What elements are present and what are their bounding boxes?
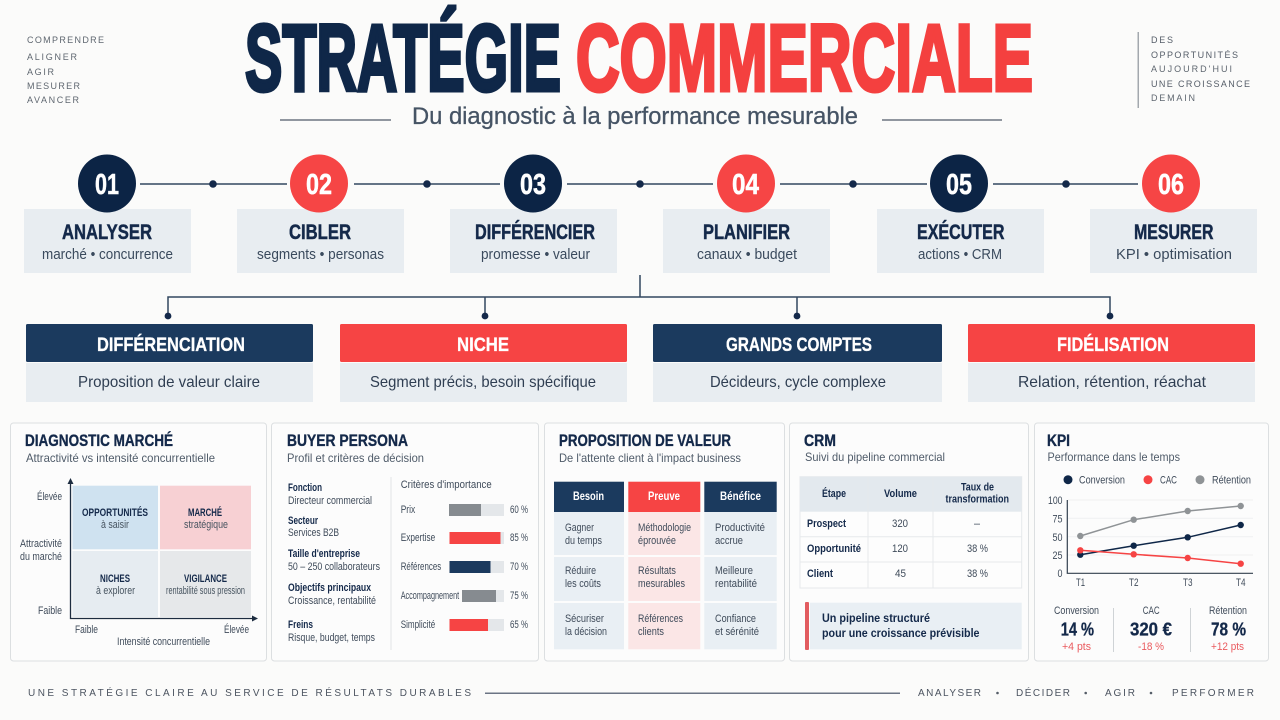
subheading: Profil et critères de décision	[287, 451, 424, 465]
stat: CAC: CAC	[1143, 605, 1160, 617]
column: besoin	[554, 482, 624, 649]
left keyword list: AVANCER	[27, 95, 80, 105]
matrix chart: stratégique	[184, 519, 228, 531]
legend: Conversion	[1079, 474, 1125, 486]
footer keywords	[918, 686, 1254, 699]
step 05: EXÉCUTER	[917, 221, 1004, 244]
pipeline table: –	[974, 518, 980, 530]
subheading: Attractivité vs intensité concurrentielle	[26, 451, 215, 465]
stat: conversion: Conversion	[1054, 605, 1099, 617]
pipeline table: Opportunité	[807, 543, 861, 555]
matrix chart: du marché	[20, 551, 62, 563]
line chart: T2	[1129, 577, 1138, 589]
pipeline table: 38 %	[967, 568, 988, 580]
step 06	[1090, 154, 1257, 273]
legend	[1064, 474, 1251, 486]
right tagline: OPPORTUNITÉS	[1151, 50, 1238, 60]
footer keywords: PERFORMER	[1172, 688, 1254, 699]
right tagline: AUJOURD'HUI	[1151, 64, 1232, 74]
matrix chart: rentabilité sous pression	[166, 585, 245, 597]
column: preuve: Méthodologie	[638, 522, 691, 534]
criteria bar chart: Simplicité	[401, 619, 435, 631]
step 05: actions • CRM	[918, 246, 1002, 263]
step 01: ANALYSER	[62, 221, 152, 244]
step 04	[663, 154, 830, 273]
pipeline table	[800, 477, 1022, 588]
stat: CAC	[1130, 605, 1172, 653]
persona profile: Objectifs principaux	[288, 582, 371, 594]
matrix chart: Attractivité	[20, 538, 62, 550]
step 01: 01	[95, 169, 119, 201]
step 05	[877, 154, 1044, 273]
step 06: 06	[1158, 169, 1184, 201]
panel: diagnostic marché	[10, 423, 266, 661]
left keyword list: COMPRENDRE	[27, 35, 104, 45]
step 01: marché • concurrence	[42, 246, 173, 263]
pipeline table: Volume	[884, 488, 917, 500]
column: bénéfice: Confiance	[715, 613, 756, 625]
stat: rétention: 78 %	[1211, 620, 1246, 640]
card: fidélisation: FIDÉLISATION	[1057, 334, 1169, 356]
criteria bar chart: 85 %	[510, 532, 528, 544]
footer keywords: ANALYSER	[918, 688, 981, 699]
pipeline table: 120	[892, 543, 908, 555]
card: niche	[340, 324, 627, 402]
card: fidélisation	[968, 324, 1255, 402]
card: grands comptes: GRANDS COMPTES	[726, 335, 872, 356]
column: bénéfice	[704, 482, 777, 649]
stat: conversion: 14 %	[1061, 620, 1094, 640]
column: bénéfice: Productivité	[715, 522, 765, 534]
criteria bar chart: Expertise	[401, 532, 435, 544]
column: bénéfice: accrue	[715, 535, 743, 547]
column: bénéfice: et sérénité	[715, 626, 759, 638]
card: différenciation: Proposition de valeur claire	[78, 374, 260, 391]
heading: BUYER PERSONA	[287, 432, 408, 450]
legend: Rétention	[1212, 474, 1251, 486]
persona profile: Croissance, rentabilité	[288, 595, 376, 607]
matrix chart: Intensité concurrentielle	[117, 636, 210, 648]
column: bénéfice: Bénéfice	[720, 489, 761, 503]
stat: rétention	[1209, 605, 1247, 653]
criteria bar chart: 65 %	[510, 619, 528, 631]
persona profile: 50 – 250 collaborateurs	[288, 561, 380, 573]
card: fidélisation: Relation, rétention, réachat	[1018, 374, 1207, 391]
stat: CAC: 320 €	[1130, 620, 1172, 640]
line chart: 50	[1052, 532, 1062, 544]
matrix chart	[20, 478, 258, 648]
criteria bar chart: 75 %	[510, 590, 528, 602]
matrix chart: Élevée	[37, 490, 62, 503]
step 02: CIBLER	[289, 221, 351, 244]
step 06: KPI • optimisation	[1116, 246, 1232, 263]
right tagline: DEMAIN	[1151, 93, 1195, 103]
matrix chart: Élevée	[224, 623, 249, 636]
heading: KPI	[1047, 432, 1070, 450]
stat: rétention: Rétention	[1209, 605, 1247, 617]
line chart: 0	[1058, 568, 1062, 580]
persona profile: Freins	[288, 619, 313, 631]
line chart: T1	[1076, 577, 1085, 589]
title: COMMERCIALE	[576, 6, 1033, 112]
step 03: 03	[520, 169, 546, 201]
persona profile: Risque, budget, temps	[288, 632, 375, 644]
column: bénéfice: rentabilité	[715, 578, 757, 590]
line chart	[1048, 495, 1253, 589]
column: preuve: mesurables	[638, 578, 686, 590]
step 04: 04	[732, 169, 759, 201]
callout	[805, 602, 1022, 650]
step 05: 05	[946, 169, 972, 201]
pipeline table: Étape	[822, 487, 846, 500]
pipeline table: Taux de	[961, 482, 994, 494]
step 04: PLANIFIER	[703, 221, 790, 244]
pipeline table: 320	[892, 518, 908, 530]
callout: pour une croissance prévisible	[822, 628, 980, 640]
panel: proposition de valeur	[544, 423, 784, 661]
column: preuve: clients	[638, 626, 665, 638]
panel: CRM	[790, 423, 1028, 661]
column: bénéfice: Meilleure	[715, 565, 753, 577]
subheading: Suivi du pipeline commercial	[805, 450, 945, 464]
column: preuve	[628, 482, 700, 649]
persona profile: Directeur commercial	[288, 495, 372, 507]
heading: DIAGNOSTIC MARCHÉ	[25, 431, 173, 450]
card: différenciation: DIFFÉRENCIATION	[97, 334, 245, 356]
persona profile: Secteur	[288, 515, 319, 527]
persona profile: Taille d'entreprise	[288, 548, 360, 560]
footer keywords: DÉCIDER	[1016, 686, 1070, 699]
criteria bar chart: Critères d'importance	[401, 479, 492, 491]
criteria bar chart: Références	[401, 561, 442, 573]
column: besoin: Besoin	[573, 489, 604, 503]
matrix chart: à explorer	[96, 585, 135, 597]
left keyword list: MESURER	[27, 81, 80, 91]
footer tagline: UNE STRATÉGIE CLAIRE AU SERVICE DE RÉSULTATS DURABLES	[28, 686, 471, 699]
column: preuve: éprouvée	[638, 535, 676, 547]
matrix chart: VIGILANCE	[184, 573, 227, 585]
column: besoin: du temps	[565, 535, 602, 547]
line chart: 100	[1048, 495, 1062, 507]
column: preuve: Résultats	[638, 565, 676, 577]
persona profile: Services B2B	[288, 527, 339, 539]
criteria bar chart	[401, 479, 528, 631]
pipeline table: Client	[807, 568, 833, 580]
column: besoin: Réduire	[565, 565, 596, 577]
process timeline connector	[140, 180, 1138, 188]
line chart: 25	[1052, 550, 1062, 562]
stat: conversion	[1054, 605, 1099, 653]
criteria bar chart: 60 %	[510, 504, 528, 516]
subheading: Performance dans le temps	[1048, 450, 1180, 464]
criteria bar chart: Accompagnement	[401, 590, 459, 602]
step 03: promesse • valeur	[481, 246, 590, 263]
step 02	[237, 154, 404, 273]
left keyword list: ALIGNER	[27, 52, 78, 62]
pipeline table: Prospect	[807, 518, 846, 530]
line chart: T3	[1183, 577, 1192, 589]
step 03	[450, 154, 617, 273]
line chart: T4	[1236, 577, 1246, 589]
step 02: segments • personas	[257, 246, 384, 263]
callout: Un pipeline structuré	[822, 613, 930, 625]
subtitle: Du diagnostic à la performance mesurable	[412, 103, 858, 130]
matrix chart: NICHES	[100, 573, 130, 585]
left keyword list	[27, 35, 104, 105]
column: besoin: la décision	[565, 626, 607, 638]
right tagline: UNE CROISSANCE	[1151, 79, 1250, 89]
matrix chart: Faible	[38, 605, 62, 617]
matrix chart: OPPORTUNITÉS	[82, 506, 148, 519]
column: besoin: Sécuriser	[565, 613, 604, 625]
heading: CRM	[804, 432, 836, 450]
pipeline table: 45	[895, 568, 906, 580]
card: grands comptes	[653, 324, 942, 402]
step 04: canaux • budget	[697, 246, 798, 263]
column: besoin: les coûts	[565, 578, 602, 590]
legend: CAC	[1160, 474, 1177, 486]
card: différenciation	[26, 324, 313, 402]
line chart: 75	[1052, 514, 1062, 526]
title: STRATÉGIE	[245, 6, 561, 112]
card: niche: Segment précis, besoin spécifique	[370, 374, 596, 391]
subheading: De l'attente client à l'impact business	[559, 451, 741, 465]
stat: conversion: +4 pts	[1062, 641, 1092, 653]
column: preuve: Références	[638, 613, 683, 625]
card: grands comptes: Décideurs, cycle complexe	[710, 374, 886, 391]
step 02: 02	[306, 169, 332, 201]
stat: rétention: +12 pts	[1211, 641, 1245, 653]
matrix chart: MARCHÉ	[188, 506, 222, 519]
matrix chart: à saisir	[101, 519, 129, 531]
step 03: DIFFÉRENCIER	[475, 221, 595, 244]
panel: KPI	[1034, 423, 1268, 661]
heading: PROPOSITION DE VALEUR	[559, 432, 731, 450]
persona profile: Fonction	[288, 482, 322, 494]
criteria bar chart: 70 %	[510, 561, 528, 573]
column: preuve: Preuve	[648, 489, 680, 503]
panel: buyer persona	[272, 423, 538, 661]
step 01	[24, 154, 191, 273]
column: besoin: Gagner	[565, 522, 594, 534]
pipeline table: transformation	[946, 494, 1009, 506]
pipeline table: 38 %	[967, 543, 988, 555]
criteria bar chart: Prix	[401, 504, 416, 516]
title	[245, 6, 1033, 112]
stat: CAC: -18 %	[1138, 641, 1164, 653]
step 06: MESURER	[1134, 221, 1214, 244]
persona profile	[288, 482, 380, 644]
footer keywords: AGIR	[1105, 688, 1135, 699]
left keyword list: AGIR	[27, 67, 54, 77]
matrix chart: Faible	[75, 624, 98, 636]
right tagline	[1138, 32, 1250, 108]
right tagline: DES	[1151, 35, 1173, 45]
tree connector	[165, 275, 1113, 319]
card: niche: NICHE	[457, 335, 509, 356]
